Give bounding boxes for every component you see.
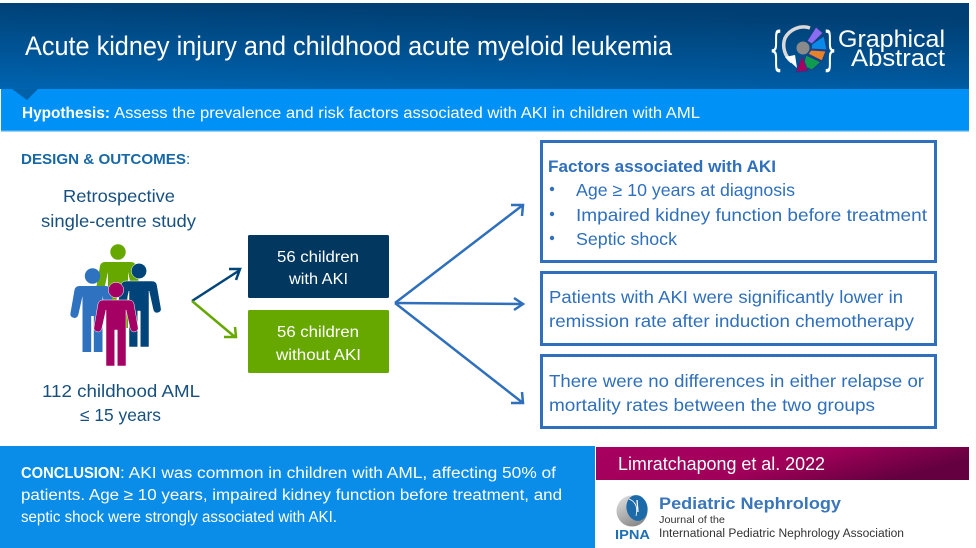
study type: single-centre study xyxy=(41,211,196,231)
arrow: to relapse xyxy=(395,303,523,403)
design heading: : xyxy=(186,151,190,168)
graphical abstract wordmark xyxy=(838,26,945,72)
title: Acute kidney injury and childhood acute myeloid leukemia xyxy=(25,31,672,61)
icon: IPNA logo xyxy=(615,493,650,542)
factors list: Septic shock xyxy=(576,229,677,249)
panel: relapse and mortality finding xyxy=(542,356,936,428)
factors list: Impaired kidney function before treatment xyxy=(576,205,927,225)
design heading: DESIGN & OUTCOMES xyxy=(21,151,186,168)
arrow: to children with AKI xyxy=(192,269,240,301)
journal name xyxy=(659,494,904,540)
citation band xyxy=(596,447,969,480)
arrow: to remission xyxy=(395,298,523,310)
panel: conclusion xyxy=(0,446,595,548)
panel: conclusion: septic shock were strongly associated with AKI. xyxy=(21,509,337,526)
factors list: Age ≥ 10 years at diagnosis xyxy=(576,180,795,200)
panel: conclusion: patients. Age ≥ 10 years, impaired kidney function before treatment, and xyxy=(21,487,562,504)
box: children with AKI xyxy=(248,235,389,298)
panel: remission finding xyxy=(542,272,936,344)
journal name: Journal of the xyxy=(659,514,725,526)
factors heading: Factors associated with AKI xyxy=(548,157,776,176)
panel: relapse and mortality finding: There were no differences in either relapse or xyxy=(549,371,924,391)
arrow: to children without AKI xyxy=(192,301,236,337)
box: children without AKI: without AKI xyxy=(275,347,361,364)
box: children without AKI: 56 children xyxy=(277,324,359,341)
header banner: } xyxy=(823,22,837,76)
study type: Retrospective xyxy=(63,186,175,206)
graphical abstract wordmark: Abstract xyxy=(851,45,945,72)
citation band: Limratchapong et al. 2022 xyxy=(618,454,825,474)
panel: remission finding: Patients with AKI were significantly lower in xyxy=(549,287,903,307)
panel: design and outcomes xyxy=(21,151,200,425)
journal name: International Pediatric Nephrology Association xyxy=(659,528,904,540)
box: children without AKI xyxy=(248,310,389,373)
factors list xyxy=(550,180,927,249)
cohort label: ≤ 15 years xyxy=(80,405,161,425)
hypothesis text: Assess the prevalence and risk factors associated with AKI in children with AML xyxy=(114,105,700,122)
header banner xyxy=(0,3,969,89)
panel: factors associated with AKI xyxy=(542,142,936,262)
icon: graphical abstract logo xyxy=(769,22,837,76)
cohort label xyxy=(42,381,200,425)
cohort label: 112 childhood AML xyxy=(42,381,200,401)
study type xyxy=(41,186,196,231)
panel: conclusion: : AKI was common in children with AML, affecting 50% of xyxy=(120,465,557,482)
icon: group of people xyxy=(70,244,161,366)
journal name: Pediatric Nephrology xyxy=(659,494,842,513)
panel: conclusion: CONCLUSION xyxy=(21,465,120,482)
hypothesis text: Hypothesis: xyxy=(22,105,110,122)
panel: remission finding: remission rate after induction chemotherapy xyxy=(549,311,914,331)
box: children with AKI: with AKI xyxy=(288,271,348,288)
hypothesis band xyxy=(1,89,969,132)
icon: graphical abstract logo: { xyxy=(769,22,783,76)
graphical abstract wordmark: Graphical xyxy=(838,26,945,53)
icon: IPNA logo: IPNA xyxy=(615,528,650,542)
arrow: to factors xyxy=(395,205,523,303)
panel: relapse and mortality finding: mortality rates between the two groups xyxy=(549,395,875,415)
box: children with AKI: 56 children xyxy=(277,249,359,266)
